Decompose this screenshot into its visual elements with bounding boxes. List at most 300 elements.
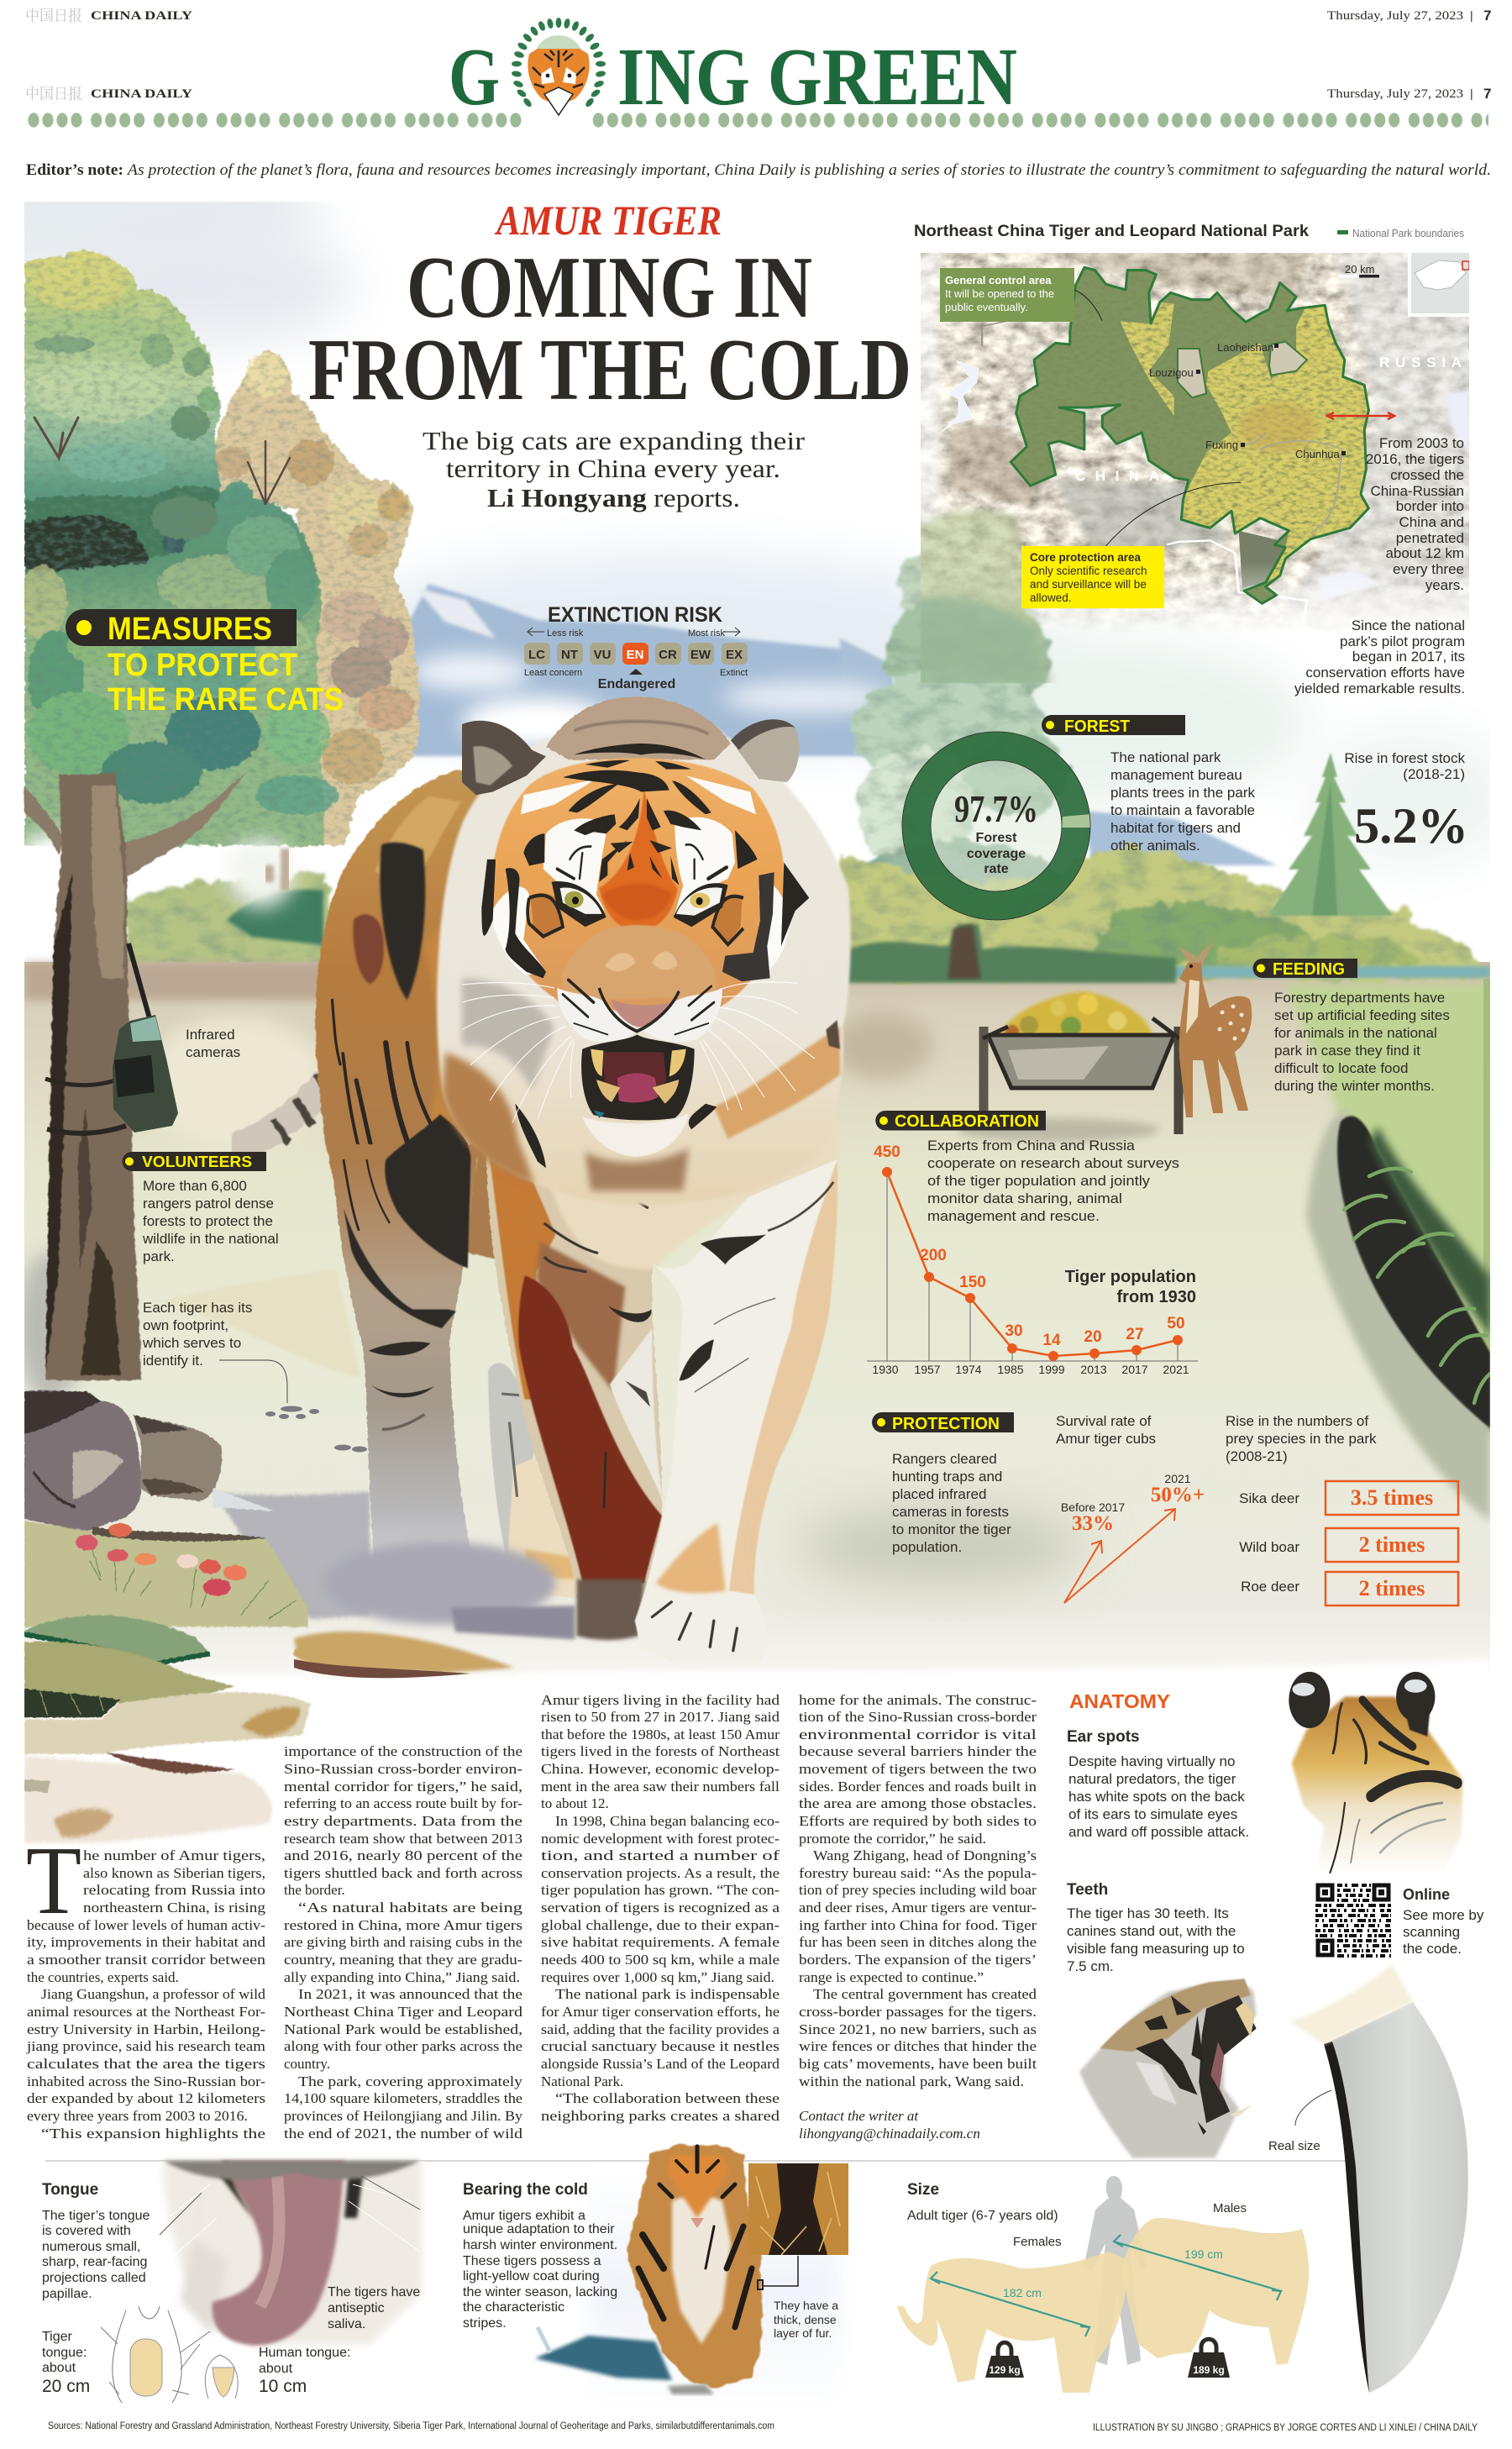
- panel: anatomy ear spots: Despite having virtually no: [1068, 1753, 1235, 1769]
- article: column 2: the end of 2021, the number of wild: [284, 2126, 523, 2142]
- text: border expansion note: China-Russian: [1371, 483, 1464, 499]
- panel: tongue: saliva.: [328, 2317, 365, 2331]
- article: column 3: [541, 1692, 780, 2124]
- muzzle: [562, 925, 717, 1005]
- general control box: General control area: [945, 274, 1052, 286]
- text: online: the code.: [1403, 1941, 1462, 1957]
- table: prey species increases: Sika deer: [1239, 1490, 1299, 1506]
- article: drop cap: T: [26, 1827, 81, 1935]
- article: column 1: northeastern China, is rising: [83, 1900, 266, 1916]
- chart: tongue size comparison: Tiger: [42, 2330, 73, 2344]
- autumn tree: [213, 350, 419, 846]
- line chart: tiger population from 1930: 2017: [1121, 1363, 1148, 1376]
- line chart: tiger population from 1930: 150: [959, 1274, 986, 1291]
- title: Going Green: G: [449, 32, 500, 122]
- panel: size comparison: Females: [1013, 2235, 1062, 2249]
- footer: credits: ILLUSTRATION BY SU JINGBO ; GRAPHICS BY JORGE CORTES AND LI XINLEI / CHINA DAILY: [1093, 2423, 1478, 2433]
- icon: weight 129 kg: [985, 2342, 1024, 2378]
- pale path and ground shadows: [17, 963, 361, 1403]
- callout: footprint: identify it.: [143, 1353, 203, 1369]
- title: Going Green: [449, 32, 1017, 122]
- lips: [557, 988, 636, 1042]
- article: column 3: to about 12.: [541, 1795, 609, 1811]
- panel: extinction risk scale: Extinct: [720, 668, 748, 678]
- article: column 4: range is expected to continue.”: [799, 1969, 984, 1985]
- article: column 3: global challenge, due to their expan-: [541, 1917, 780, 1933]
- ears: [462, 721, 546, 795]
- line chart: tiger population from 1930: 27: [1126, 1326, 1144, 1343]
- panel: tongue: papillae.: [42, 2287, 92, 2301]
- article: column 4: wire fences or ditches that hinder the: [799, 2038, 1037, 2054]
- article: column 2: importance of the construction of the: [284, 1743, 522, 1759]
- icon: weight 129 kg: 129 kg: [989, 2364, 1021, 2376]
- article: column 3: servation of tigers is recognized as a: [541, 1900, 780, 1916]
- panel: tongue: The tiger’s tongue: [42, 2209, 150, 2223]
- donut: forest coverage: [902, 732, 1091, 920]
- article: column 1: relocating from Russia into: [83, 1882, 265, 1898]
- article: column 3: tigers lived in the forests of Northeast: [541, 1743, 780, 1759]
- park outline: [1011, 267, 1368, 603]
- panel: anatomy ear spots: ANATOMY: [1069, 1690, 1170, 1712]
- stat: forest stock: Rise in forest stock: [1344, 750, 1465, 766]
- panel: feeding: set up artificial feeding sites: [1274, 1007, 1450, 1023]
- chart: cub survival rate arrows: 50%+: [1151, 1484, 1205, 1506]
- panel: collaboration: [875, 1111, 1179, 1224]
- donut: forest coverage: rate: [984, 862, 1009, 876]
- text: border expansion note: every three: [1393, 561, 1464, 577]
- article: column 4: big cats’ movements, have been built: [799, 2056, 1037, 2072]
- article: column 2: [284, 1743, 523, 2142]
- panel: bearing the cold: stripes.: [463, 2316, 507, 2331]
- line chart: tiger population from 1930: 1999: [1038, 1363, 1065, 1376]
- core protection box: and surveillance will be: [1030, 578, 1147, 591]
- table: prey species increases: (2008-21): [1226, 1448, 1288, 1464]
- article: column 1: animal resources at the Northeast For-: [27, 2004, 265, 2020]
- illustration: tiger fang real size: [1268, 1964, 1468, 2393]
- panel: measures heading: MEASURES: [108, 612, 272, 647]
- header: second masthead line: CHINA DAILY: [91, 87, 193, 101]
- illustration: tiger fang real size: Real size: [1268, 2139, 1320, 2153]
- panel: extinction risk scale: LC: [528, 648, 545, 662]
- line chart: tiger population from 1930: 1974: [955, 1363, 982, 1376]
- article: column 3: said, adding that the facility provides a: [541, 2021, 780, 2037]
- panel: bearing the cold: layer of fur.: [774, 2326, 832, 2340]
- panel: bearing the cold: [463, 2144, 848, 2420]
- panel: teeth: The tiger has 30 teeth. Its: [1067, 1905, 1229, 1921]
- text: pilot program results: [1294, 618, 1465, 696]
- article: column 1: Jiang Guangshun, a professor of wild: [41, 1986, 266, 2002]
- article: column 4: Since 2021, no new barriers, such as: [799, 2021, 1037, 2037]
- illustration: tree trunk with branches: [24, 772, 246, 1380]
- article: column 4: Efforts are required by both sides to: [799, 1813, 1037, 1829]
- header: first masthead line: Thursday, July 27, 2023: [1327, 9, 1463, 23]
- mountains: [370, 584, 1277, 865]
- panel: forest: other animals.: [1110, 838, 1200, 854]
- subheading: [423, 426, 806, 512]
- icon: weight 189 kg: [1188, 2339, 1230, 2378]
- inset: fur close-up: [748, 2163, 848, 2289]
- sky wash: [0, 134, 1512, 865]
- panel: size comparison: Size: [907, 2181, 939, 2199]
- chart: cub survival rate arrows: 2021: [1164, 1472, 1191, 1485]
- decorative leaf row: [27, 112, 1488, 129]
- panel: size comparison: [897, 2176, 1309, 2393]
- panel: bearing the cold: light-yellow coat during: [463, 2269, 600, 2283]
- panel: tongue: is covered with: [42, 2224, 131, 2238]
- country labels: [1075, 355, 1462, 484]
- footer: sources: Sources: National Forestry and Grassland Administration, Northeast Forestry University, Siberia Tiger Park, International Journal of Geoheritage and Parks, similarbutdifferentanimals.com: [48, 2421, 774, 2431]
- text: infrared cameras: cameras: [186, 1044, 240, 1060]
- panel: feeding: FEEDING: [1273, 960, 1345, 979]
- main headline: COMING IN: [407, 238, 812, 336]
- article: column 3: nomic development with forest protec-: [541, 1831, 780, 1847]
- article: column 3: requires over 1,000 sq km,” Jiang said.: [541, 1969, 774, 1985]
- whiskers: [462, 982, 815, 1123]
- place labels: Chunhua: [1295, 448, 1341, 460]
- panel: protection: Rangers cleared: [892, 1451, 997, 1467]
- illustration: tiger in snow: [535, 2144, 840, 2420]
- chart: cub survival rate arrows: Survival rate of: [1056, 1413, 1152, 1429]
- map: national park: [916, 250, 1470, 685]
- text: pilot program results: conservation efforts have: [1305, 665, 1465, 681]
- map title and legend: National Park boundaries: [1352, 227, 1464, 239]
- article: column 3: needs 400 to 500 sq km, while a male: [541, 1952, 780, 1968]
- panel: bearing the cold: the characteristic: [463, 2300, 564, 2315]
- article: column 4: borders. The expansion of the tigers’: [799, 1952, 1037, 1968]
- panel: extinction risk scale: EW: [690, 648, 711, 662]
- article: column 3: tion, and started a number of: [541, 1847, 780, 1863]
- callout: footprint: Each tiger has its: [143, 1300, 252, 1316]
- panel: collaboration: cooperate on research about surveys: [927, 1155, 1179, 1171]
- article: column 1: “This expansion highlights the: [41, 2126, 265, 2142]
- panel: bearing the cold: harsh winter environment.: [463, 2238, 617, 2252]
- text: pilot program results: park’s pilot program: [1340, 633, 1465, 649]
- panel: protection: PROTECTION: [892, 1415, 1000, 1433]
- article: column 2: Northeast China Tiger and Leopard: [284, 2004, 523, 2020]
- QR code: [1315, 1885, 1391, 1956]
- panel: volunteers: More than 6,800: [143, 1178, 247, 1194]
- panel: measures heading: [66, 609, 344, 717]
- ground cutoff under art: [294, 1508, 1504, 1705]
- article: column 3: National Park.: [541, 2073, 623, 2089]
- icon: human silhouette: [1084, 2176, 1147, 2365]
- footprints on path: [265, 1406, 367, 1452]
- chart: tongue size comparison: tongue:: [42, 2346, 87, 2360]
- panel: measures heading: THE RARE CATS: [108, 682, 344, 717]
- core protection box: [1021, 546, 1164, 608]
- article: column 4: because several barriers hinder the: [799, 1743, 1037, 1759]
- green wash lower-left: [916, 509, 1052, 685]
- rear legs and front left leg: [324, 1114, 664, 1640]
- illustration: fawn: [1179, 943, 1252, 1117]
- chart: cub survival rate arrows: Before 2017: [1061, 1500, 1125, 1514]
- article: column 2: ally expanding into China,” Jiang said.: [284, 1969, 520, 1985]
- article: column 1: inhabited across the Sino-Russian bor-: [27, 2073, 265, 2089]
- panel: extinction risk scale: EX: [726, 648, 743, 662]
- illustration: landscape background: [0, 134, 1512, 1842]
- text: pilot program results: Since the national: [1352, 618, 1465, 633]
- header: first masthead line: CHINA DAILY: [91, 9, 193, 23]
- article: column 2: Sino-Russian cross-border environ-: [284, 1761, 522, 1777]
- text: infrared cameras: [186, 1027, 240, 1060]
- panel: forest: [902, 715, 1255, 920]
- article: column 3: that before the 1980s, at least 150 Amur: [541, 1726, 780, 1742]
- header: second masthead line: [25, 85, 1491, 102]
- article: column 2: 14,100 square kilometers, straddles the: [284, 2090, 522, 2106]
- line chart: tiger population from 1930: 2021: [1163, 1363, 1189, 1376]
- article: column 2: mental corridor for tigers,” he said,: [284, 1779, 522, 1795]
- line chart: tiger population from 1930: [867, 1143, 1198, 1376]
- panel: measures heading: TO PROTECT: [108, 648, 297, 683]
- article: column 2: research team show that between 2013: [284, 1831, 522, 1847]
- callout: footprint: which serves to: [142, 1335, 241, 1351]
- torso flank: [316, 770, 590, 1268]
- yellow green hillside: [840, 847, 1490, 979]
- article: column 2: and 2016, nearly 80 percent of the: [284, 1847, 522, 1863]
- article: column 2: the border.: [284, 1882, 345, 1898]
- header: first masthead line: [25, 7, 1491, 24]
- article: column 2: are giving birth and raising cubs in the: [284, 1934, 522, 1950]
- silhouette: male tiger: [1121, 2218, 1309, 2365]
- general control box: public eventually.: [945, 301, 1028, 313]
- article: column 3: China. However, economic develop-: [541, 1761, 780, 1777]
- panel: anatomy ear spots: and ward off possible attack.: [1068, 1824, 1249, 1840]
- header: first masthead line: 7: [1483, 8, 1491, 24]
- general control box: [940, 268, 1074, 322]
- panel: extinction risk scale: EN: [627, 648, 643, 662]
- panel: collaboration: of the tiger population and jointly: [927, 1173, 1151, 1189]
- chart: cub survival rate arrows: Amur tiger cubs: [1056, 1431, 1156, 1447]
- line chart: tiger population from 1930: 2013: [1080, 1363, 1107, 1376]
- core protection box: Only scientific research: [1030, 565, 1147, 577]
- panel: collaboration: Experts from China and Russia: [927, 1138, 1136, 1154]
- panel: teeth: [1067, 1881, 1245, 1974]
- article: column 1: he number of Amur tigers,: [83, 1847, 265, 1863]
- article: column 4: fur has been seen in ditches along the: [799, 1934, 1037, 1950]
- line chart: tiger population from 1930: Tiger population: [1065, 1268, 1196, 1286]
- article: column 3: risen to 50 from 27 in 2017. Jiang said: [541, 1709, 780, 1725]
- clouds behind head: [412, 654, 890, 748]
- panel: extinction risk scale: [524, 603, 748, 691]
- table: prey species increases: Roe deer: [1241, 1579, 1299, 1595]
- map title and legend: Northeast China Tiger and Leopard National Park: [914, 223, 1309, 240]
- country labels: RUSSIA: [1379, 355, 1462, 371]
- line chart: tiger population from 1930: 1930: [872, 1363, 899, 1376]
- panel: size comparison: 182 cm: [1003, 2286, 1042, 2299]
- panel: volunteers: rangers patrol dense: [143, 1196, 274, 1211]
- place labels: Laoheishan: [1217, 341, 1273, 354]
- stat: forest stock: 5.2%: [1354, 798, 1468, 854]
- front right leg and chest: [533, 1096, 837, 1662]
- article: column 2: tigers shuttled back and forth across: [284, 1865, 522, 1881]
- title: Going Green: ING GREEN: [617, 32, 1017, 122]
- panel: protection: [872, 1412, 1014, 1555]
- panel: volunteers: [123, 1152, 279, 1264]
- chart: tongue size comparison: about: [259, 2362, 293, 2376]
- white brow and cheek patches: [490, 775, 790, 975]
- park west olive: [1011, 267, 1368, 603]
- panel: bearing the cold: unique adaptation to their: [463, 2222, 615, 2236]
- article: column 4: ing farther into China for food. Tiger: [799, 1917, 1037, 1933]
- main headline: FROM THE COLD: [308, 320, 911, 418]
- line chart: tiger population from 1930: 1957: [914, 1363, 941, 1376]
- article: column 3: Amur tigers living in the facility had: [541, 1692, 780, 1708]
- panel: extinction risk scale: CR: [659, 648, 677, 662]
- panel: teeth: visible fang measuring up to: [1067, 1941, 1245, 1957]
- table: prey species increases: 2 times: [1359, 1532, 1425, 1557]
- chart: cub survival rate arrows: 33%: [1072, 1512, 1114, 1535]
- main headline: [308, 238, 911, 418]
- tail: [239, 1075, 334, 1147]
- text: border expansion note: China and: [1399, 514, 1464, 530]
- article: column 4: cross-border passages for the tigers.: [799, 2004, 1037, 2020]
- article: column 2: The park, covering approximately: [298, 2073, 523, 2089]
- stat: forest stock: (2018-21): [1403, 766, 1465, 782]
- article: column 4: tion of the Sino-Russian cross-border: [799, 1709, 1037, 1725]
- stat: forest stock: [1344, 750, 1468, 854]
- panel: size comparison: 199 cm: [1184, 2247, 1223, 2261]
- place labels: Louzigou: [1149, 366, 1194, 379]
- text: online: scanning: [1403, 1924, 1460, 1940]
- panel: volunteers: park.: [143, 1248, 175, 1264]
- panel: anatomy ear spots: natural predators, the tiger: [1068, 1771, 1236, 1787]
- right misty tree: [850, 553, 1074, 887]
- panel: bearing the cold: thick, dense: [774, 2313, 837, 2326]
- icon: infrared camera strapped to tree: [45, 943, 178, 1133]
- donut: forest coverage: 97.7%: [954, 787, 1038, 830]
- chart: tongue size comparison: Human tongue:: [259, 2346, 350, 2360]
- panel: forest: FOREST: [1064, 717, 1130, 736]
- panel: forest: to maintain a favorable: [1110, 802, 1255, 818]
- article: column 1: ity, improvements in their habitat and: [27, 1934, 266, 1950]
- panel: forest: The national park: [1110, 749, 1221, 765]
- panel: extinction risk scale: Most risk: [688, 628, 726, 639]
- panel: size comparison: Males: [1213, 2201, 1247, 2215]
- line chart: tiger population from 1930: 14: [1042, 1332, 1061, 1349]
- article: column 1: also known as Siberian tigers,: [83, 1865, 265, 1881]
- article: column 3: neighboring parks creates a shared: [541, 2108, 780, 2124]
- panel: protection: to monitor the tiger: [892, 1521, 1011, 1537]
- text: infrared cameras: Infrared: [186, 1027, 235, 1043]
- article: column 3: sive habitat requirements. A female: [541, 1934, 780, 1950]
- article: column 4: promote the corridor,” he said.: [799, 1831, 986, 1847]
- article: column 2: National Park would be established,: [284, 2021, 522, 2037]
- panel: bearing the cold: Bearing the cold: [463, 2181, 588, 2199]
- line chart: tiger population from 1930: 30: [1005, 1322, 1023, 1340]
- panel: extinction risk scale: Less risk: [547, 628, 584, 639]
- panel: collaboration: COLLABORATION: [895, 1112, 1039, 1131]
- blaze: [599, 789, 678, 930]
- text: border expansion note: about 12 km: [1385, 545, 1464, 561]
- place labels: [1149, 341, 1346, 460]
- article: column 2: restored in China, more Amur tigers: [284, 1917, 522, 1933]
- article: column 3: tiger population has grown. “The con-: [541, 1882, 780, 1898]
- panel: forest: habitat for tigers and: [1110, 820, 1241, 836]
- icon: weight 189 kg: 189 kg: [1193, 2364, 1225, 2376]
- article: column 1: the countries, experts said.: [27, 1969, 179, 1985]
- panel: anatomy ear spots: [1067, 1690, 1249, 1840]
- panel: volunteers: wildlife in the national: [142, 1231, 279, 1247]
- fir tree: [1268, 753, 1393, 916]
- text: online: [1403, 1886, 1484, 1957]
- left tree canopy: [17, 250, 339, 846]
- chart: tongue size comparison: 20 cm: [42, 2377, 90, 2396]
- table: prey species increases: Wild boar: [1239, 1539, 1299, 1555]
- text: pilot program results: yielded remarkable results.: [1294, 681, 1465, 696]
- arrow: male length: [1114, 2235, 1281, 2300]
- illustration: feeding trough with fruit: [958, 991, 1179, 1142]
- article: column 2: estry departments. Data from the: [284, 1813, 522, 1829]
- text: border expansion note: 2016, the tigers: [1366, 451, 1464, 467]
- chart: cub survival rate arrows: [1056, 1413, 1205, 1603]
- inset and scale: [1339, 250, 1469, 317]
- donut: forest coverage: Forest: [976, 831, 1017, 845]
- header: second masthead line: |: [1470, 87, 1473, 100]
- article: column 1: estry University in Harbin, Heilong-: [27, 2021, 265, 2037]
- article: column 1: jiang province, said his research team: [26, 2038, 265, 2054]
- place labels: Fuxing: [1205, 439, 1238, 451]
- line chart: tiger population from 1930: 200: [920, 1247, 947, 1264]
- panel: feeding: Forestry departments have: [1274, 990, 1445, 1006]
- icon: tiger emblem in leaf wreath: [512, 18, 606, 115]
- panel: extinction risk scale: Endangered: [598, 677, 675, 691]
- panel: extinction risk scale: Least concern: [524, 668, 582, 678]
- general control box: It will be opened to the: [945, 287, 1054, 300]
- lake and distant trees: [832, 924, 1490, 1080]
- text: border expansion note: From 2003 to: [1379, 435, 1464, 451]
- panel: bearing the cold: Amur tigers exhibit a: [463, 2209, 585, 2223]
- editor's note: Editor’s note: As protection of the planet’s flora, fauna and resources becomes increasingly important, China Daily is publishing a series of stories to illustrate the country’s commitment to safeguarding the natural world.: [26, 161, 1491, 179]
- line chart: tiger population from 1930: from 1930: [1117, 1288, 1196, 1306]
- panel: teeth: Teeth: [1067, 1881, 1108, 1899]
- text: online: Online: [1403, 1886, 1450, 1903]
- article: column 1: because of lower levels of human activ-: [27, 1917, 265, 1933]
- arrow: female length: [931, 2272, 1089, 2336]
- panel: anatomy ear spots: has white spots on the back: [1068, 1789, 1245, 1805]
- article: column 3: alongside Russia’s Land of the Leopard: [541, 2056, 780, 2072]
- panel: protection: placed infrared: [892, 1486, 986, 1502]
- foreground rocks flowers and banks: [24, 1390, 370, 1842]
- callout: footprint: [142, 1300, 287, 1403]
- text: border expansion note: years.: [1425, 577, 1464, 593]
- panel: teeth: 7.5 cm.: [1067, 1958, 1114, 1974]
- article: column 3: ment in the area saw their numbers fall: [541, 1779, 780, 1795]
- ground: [24, 962, 1490, 1705]
- panel: tongue: numerous small,: [42, 2240, 140, 2254]
- panel: tongue: The tigers have: [328, 2285, 420, 2299]
- panel: volunteers: VOLUNTEERS: [142, 1154, 252, 1170]
- panel: feeding: [1253, 959, 1450, 1094]
- article: column 4: within the national park, Wang said.: [799, 2073, 1024, 2089]
- header: first masthead line: 中国日报: [25, 7, 82, 24]
- article: column 3: The national park is indispensable: [555, 1986, 780, 2002]
- article: column 4: tion of prey species including wild boar: [799, 1882, 1037, 1898]
- article: column 3: for Amur tiger conservation efforts, he: [541, 2004, 780, 2020]
- panel: forest: management bureau: [1110, 767, 1242, 783]
- callout: footprint: own footprint,: [143, 1317, 228, 1333]
- header: first masthead line: |: [1470, 8, 1473, 22]
- dust: [324, 1542, 556, 1625]
- front left leg: [486, 1137, 662, 1636]
- article: column 3: “The collaboration between these: [555, 2090, 780, 2106]
- eye surrounds and eyes: [531, 895, 563, 937]
- panel: tongue: projections called: [42, 2271, 146, 2285]
- table: prey species increases: 3.5 times: [1351, 1485, 1433, 1510]
- article: column 2: along with four other parks across the: [284, 2038, 522, 2054]
- article: column 2: provinces of Heilongjiang and Jilin. By: [284, 2108, 523, 2124]
- head and ruff in reference-scale coordinates: [437, 696, 851, 1205]
- silhouette: female tiger: [897, 2252, 1128, 2393]
